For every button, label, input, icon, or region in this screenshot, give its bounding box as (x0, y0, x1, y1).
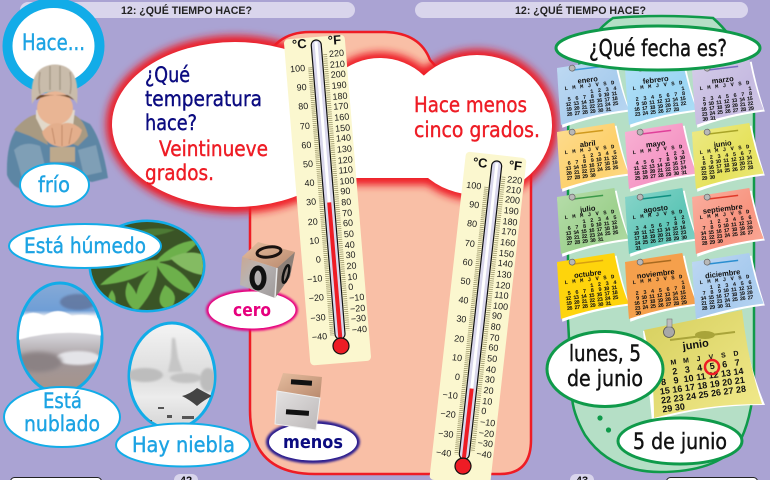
calendar: noviembre: L M M J V S D (632, 273, 683, 286)
thermometer: 29 degrees: 60 (301, 140, 312, 151)
calendar: marzo: 23 24 25 26 27 28 29 (701, 105, 754, 118)
calendar: septiembre: 14 15 16 17 18 19 20 (700, 224, 753, 237)
calendar: agosto (622, 187, 699, 257)
thermometer: 29 degrees: −30 (310, 312, 326, 323)
thermometer: minus 5 degrees: 110 (494, 290, 509, 301)
calendar: marzo: 1 (699, 85, 753, 98)
thermometer: minus 5 degrees: 60 (488, 342, 499, 353)
calendar: enero: 5 6 7 8 9 10 11 (565, 90, 618, 103)
menos bubble (266, 420, 360, 464)
calendar: junio small (689, 122, 766, 192)
large calendar note: junio: 10 (683, 373, 694, 384)
calendar: julio: L M M J V S D (564, 208, 615, 221)
calendar: diciembre: 7 8 9 10 11 12 13 (700, 284, 753, 297)
calendar: agosto: 17 18 19 20 21 22 23 (634, 229, 688, 242)
thermometer: minus 5 degrees: −40 (476, 449, 492, 460)
calendar: junio small: 1 2 3 4 5 6 7 (699, 149, 752, 162)
thermometer: 29 degrees: 110 (338, 164, 353, 176)
Hay niebla bubble: Hay niebla (132, 433, 235, 457)
large calendar note: junio: 14 (733, 366, 744, 377)
calendar: mayo: 25 26 27 28 29 30 31 (634, 169, 688, 182)
calendar: septiembre: L M M J V S D (699, 208, 750, 221)
thermometer: 29 degrees: −40 (351, 324, 367, 335)
large calendar note: junio: 18 (697, 380, 708, 391)
calendar: junio small: 15 16 17 18 19 20 21 (700, 159, 754, 172)
thermometer: 29 degrees: °F (327, 32, 342, 48)
thermometer: minus 5 degrees: °C (472, 154, 489, 171)
calendar: julio: 1 2 3 4 5 (564, 214, 618, 227)
calendar: febrero: 9 10 11 12 13 14 15 (633, 95, 687, 108)
calendar: octubre: 12 13 14 15 16 17 18 (565, 289, 619, 302)
thermometer: 29 degrees: 80 (298, 101, 309, 112)
calendar: noviembre: 30 (635, 309, 641, 317)
calendar: abril: 27 28 29 30 (566, 172, 596, 182)
calendar: marzo: 16 17 18 19 20 21 22 (701, 100, 754, 113)
calendar: julio (554, 187, 631, 257)
thermometer: minus 5 degrees: 210 (506, 184, 522, 196)
large calendar note: junio: 11 (696, 371, 706, 382)
thermometer: minus 5 degrees: 100 (466, 180, 482, 191)
calendar: febrero: L M M J V S D (632, 79, 683, 92)
calendar: mayo: mayo (645, 138, 666, 150)
thermometer: minus 5 degrees: 140 (497, 258, 513, 269)
Está nublado bubble: Está (43, 389, 82, 413)
large calendar note: junio: 26 (710, 387, 722, 398)
icon: die with minus sign (275, 373, 322, 430)
thermometer: 29 degrees: 100 (290, 63, 306, 74)
thermometer: minus 5 degrees: −40 (436, 447, 452, 459)
thermometer: 29 degrees: −40 (311, 331, 328, 342)
calendar: septiembre: 7 8 9 10 11 12 13 (700, 219, 753, 232)
calendar: abril: 20 21 22 23 24 25 26 (566, 164, 619, 177)
calendar: marzo: L M M J V S D (699, 79, 750, 92)
calendar: abril: L M M J V S D (564, 143, 615, 156)
thermometer: minus 5 degrees: 20 (454, 333, 465, 344)
calendar: octubre (554, 252, 631, 322)
thermometer: minus 5 degrees: 190 (503, 205, 519, 217)
calendar: marzo: 30 31 (702, 114, 717, 123)
large calendar note: junio: 19 (709, 378, 720, 390)
thermometer: minus 5 degrees: 220 (507, 174, 523, 186)
calendar: febrero: febrero (642, 74, 669, 86)
calendar: abril: 6 7 8 9 10 11 12 (565, 154, 617, 167)
thermometer: minus 5 degrees: 90 (469, 199, 480, 210)
calendar: diciembre (689, 252, 766, 322)
5 de junio bubble: 5 de junio (633, 430, 727, 455)
large calendar note: junio: 13 (720, 368, 732, 379)
thermometer: 29 degrees: −30 (350, 313, 366, 324)
calendar: junio small: 22 23 24 25 26 27 28 (701, 164, 755, 177)
thermometer: minus 5 degrees: −20 (478, 428, 495, 439)
calendar: noviembre: 2 3 4 5 6 7 8 (633, 284, 686, 297)
thermometer: minus 5 degrees: 170 (501, 226, 517, 238)
thermometer: minus 5 degrees: 0 (454, 372, 460, 382)
lunes, 5 de junio bubble: lunes, 5 (569, 342, 641, 367)
calendar: septiembre: septiembre (702, 202, 743, 216)
large calendar note: junio: J (696, 356, 701, 363)
calendar: octubre: 19 20 21 22 23 24 25 (566, 294, 620, 307)
thermometer: 29 degrees: 0 (348, 282, 354, 292)
thermometer: minus 5 degrees: 160 (500, 237, 516, 248)
decorative dots (597, 415, 611, 433)
thermometer: 29 degrees: 30 (345, 249, 356, 260)
calendar: mayo: 11 12 13 14 15 16 17 (633, 159, 686, 172)
calendar: enero (554, 58, 631, 128)
calendar: febrero (622, 58, 699, 128)
thermometer: minus 5 degrees: 30 (456, 313, 467, 325)
calendar: abril: 13 14 15 16 17 18 19 (565, 159, 618, 172)
calendar: marzo: 9 10 11 12 13 14 15 (700, 95, 754, 108)
calendar: marzo: marzo (711, 74, 735, 86)
calendar: agosto: L M M J V S D (632, 208, 683, 221)
large calendar note: junio: 28 (735, 384, 747, 395)
thermometer: 29 degrees: 170 (333, 101, 349, 112)
calendar: junio small: 8 9 10 11 12 13 14 (700, 154, 753, 167)
large calendar note: junio: M (670, 359, 677, 367)
calendar: abril: abril (579, 138, 596, 149)
large calendar note: junio: 22 (660, 394, 672, 406)
large calendar note: junio: 16 (672, 384, 683, 395)
question text: temperatura (145, 87, 262, 111)
thermometer: 29 degrees: 100 (339, 175, 355, 187)
calendar: junio small: L M M J V S D (699, 143, 750, 156)
large calendar note: junio: 21 (734, 375, 745, 386)
calendar: octubre: 5 6 7 8 9 10 11 (565, 284, 618, 297)
Está húmedo bubble: Está húmedo (24, 234, 146, 258)
frío bubble (20, 164, 89, 206)
Está húmedo bubble (9, 224, 161, 268)
calendar: noviembre (622, 252, 699, 322)
thermometer: minus 5 degrees: −10 (479, 417, 496, 428)
thermometer: minus 5 degrees: −30 (477, 438, 493, 449)
thermometer: 29 degrees: 40 (304, 178, 315, 188)
thermometer: minus 5 degrees: −30 (438, 428, 454, 440)
calendar: septiembre: 21 22 23 24 25 26 27 (701, 229, 754, 242)
large calendar note: junio: 12 (708, 369, 719, 381)
frío bubble: frío (38, 173, 70, 197)
Hace bubble: Hace... (22, 31, 85, 56)
thermometer: minus 5 degrees: 180 (502, 216, 518, 228)
calendar: agosto: 24 25 26 27 28 29 30 (634, 234, 687, 247)
calendar: junio small: 29 30 (701, 174, 715, 182)
thermometer: minus 5 degrees: 130 (496, 269, 512, 280)
large calendar note: junio: 2 (672, 366, 678, 377)
thermometer: 29 degrees: −20 (308, 292, 324, 303)
thermometer: 29 degrees: 10 (347, 271, 358, 282)
calendar: octubre: L M M J V S D (564, 273, 615, 286)
large calendar note: junio: V (708, 354, 714, 361)
header bar left: 12: ¿QUÉ TIEMPO HACE? (121, 4, 252, 17)
photo: clouds (14, 283, 104, 393)
thermometer: 29 degrees: 160 (334, 112, 350, 123)
icon: boy blowing on hands (7, 64, 108, 190)
header bar right (415, 2, 748, 18)
thermometer: minus 5 degrees: 80 (467, 218, 478, 229)
calendar: octubre: 1 2 3 4 (564, 279, 618, 292)
thermometer: minus 5 degrees: 100 (493, 300, 509, 312)
thermometer: minus 5 degrees: 50 (487, 353, 498, 364)
thermometer: 29 degrees: 20 (346, 260, 357, 271)
calendar: agosto: 10 11 12 13 14 15 16 (633, 224, 686, 237)
answer: hace menos cinco grados: cinco grados. (414, 118, 540, 142)
large calendar note: junio: 20 (722, 377, 733, 388)
large calendar note: junio: 30 (674, 401, 685, 413)
calendar: noviembre: 9 10 11 12 13 14 15 (633, 289, 687, 302)
thermometer: 29 degrees: 90 (296, 82, 307, 93)
calendar: febrero: 2 3 4 5 6 7 8 (633, 90, 686, 103)
large calendar note: junio: 7 (734, 357, 740, 368)
large calendar note: junio: 23 (673, 392, 684, 404)
answer: hace menos cinco grados: Hace menos (414, 93, 527, 117)
thermometer: 29 degrees: 120 (337, 154, 353, 166)
thermometer: 29 degrees: 30 (306, 197, 316, 207)
thermometer: 29 degrees: 50 (343, 229, 354, 239)
¿Qué fecha es? bubble: ¿Qué fecha es? (589, 36, 727, 62)
thermometer: 29 degrees: −10 (349, 292, 365, 303)
Está nublado bubble (4, 387, 120, 447)
large calendar note: junio: 3 (684, 364, 690, 375)
calendar: enero: L M M J V S D (564, 79, 615, 92)
question text (145, 63, 262, 135)
thermometer: minus 5 degrees: −10 (442, 389, 458, 401)
thermometer: 29 degrees: 70 (299, 121, 310, 132)
thermometer: 29 degrees: 210 (330, 59, 345, 70)
calendar: febrero: 16 17 18 19 20 21 22 (634, 100, 687, 113)
answer: veintinueve grados (145, 137, 268, 185)
calendar: septiembre: 28 29 30 (701, 238, 723, 247)
thermometer: minus 5 degrees: 10 (451, 352, 463, 363)
thermometer: minus 5 degrees: 40 (458, 295, 469, 306)
calendar: diciembre: 14 15 16 17 18 19 20 (700, 289, 753, 302)
thermometer: 29 degrees (283, 32, 371, 366)
calendar: agosto: 1 2 (632, 214, 685, 227)
calendar: julio: julio (578, 203, 596, 214)
calendar: mayo: 1 2 3 (632, 149, 686, 162)
large calendar note: junio: 29 (662, 403, 673, 414)
calendar: mayo (622, 122, 699, 192)
thermometer: 29 degrees: 180 (332, 91, 348, 102)
calendar: julio: 6 7 8 9 10 11 12 (565, 219, 617, 232)
footer right (570, 474, 758, 480)
calendar: mayo: 18 19 20 21 22 23 24 (634, 164, 688, 177)
calendar: enero: 26 27 28 29 30 31 (566, 106, 612, 118)
calendar: julio: 20 21 22 23 24 25 26 (566, 229, 619, 242)
calendar: noviembre: 16 17 18 19 20 21 22 (634, 294, 687, 307)
large calendar note: junio: 17 (684, 382, 695, 393)
thermometer: 29 degrees: −10 (307, 273, 323, 285)
Hay niebla bubble (116, 424, 250, 466)
calendar: julio: 27 28 29 30 31 (566, 236, 605, 247)
calendar: agosto: 3 4 5 6 7 8 9 (633, 219, 685, 232)
thermometer: minus 5 degrees: °F (508, 157, 523, 174)
thermometer: 29 degrees: 200 (330, 69, 346, 80)
Está nublado bubble: nublado (24, 412, 100, 436)
large calendar note: junio: 25 (698, 389, 709, 400)
thermometer: 29 degrees: 60 (343, 218, 353, 228)
icon: die with zero (240, 242, 295, 298)
calendar: septiembre: 1 2 3 4 5 6 (699, 214, 752, 227)
thermometer: 29 degrees: 150 (335, 123, 351, 134)
answer: veintinueve grados: Veintinueve (159, 137, 268, 161)
calendar: noviembre: 1 (632, 279, 686, 292)
large calendar note: junio: S (721, 352, 727, 360)
large calendar note: junio: M (683, 357, 690, 365)
thermometer: 29 degrees: °C (292, 36, 308, 52)
thermometer: 29 degrees: 50 (303, 159, 313, 169)
calendar: julio: 13 14 15 16 17 18 19 (565, 224, 618, 237)
large calendar note: junio (643, 310, 765, 421)
calendar: diciembre: diciembre (705, 267, 741, 280)
large calendar note: junio: 5 (709, 361, 715, 371)
thermometer: minus 5 degrees: 10 (482, 396, 493, 407)
footer left (10, 474, 198, 480)
thermometer: minus 5 degrees: 120 (495, 280, 511, 291)
calendar: enero: 19 20 21 22 23 24 25 (566, 100, 620, 113)
thermometer: minus 5 degrees: 80 (490, 321, 501, 332)
thermometer: 29 degrees: 40 (344, 240, 355, 250)
calendar: octubre: octubre (573, 268, 602, 280)
thermometer: minus 5 degrees: 70 (489, 332, 500, 343)
calendar: diciembre: 21 22 23 24 25 26 27 (701, 294, 754, 307)
calendar: diciembre: L M M J V S D (699, 273, 750, 286)
question text: hace? (145, 111, 197, 135)
calendar: noviembre: noviembre (636, 267, 675, 281)
thermometer: minus 5 degrees: 50 (460, 276, 471, 287)
large calendar note: junio: 27 (723, 385, 734, 397)
thermometer: minus 5 degrees: 60 (462, 257, 473, 268)
thermometer: minus 5 degrees: 150 (498, 248, 514, 259)
lunes, 5 de junio bubble (547, 332, 663, 406)
thermometer: 29 degrees: 220 (329, 48, 344, 59)
panel: peach temperature background (250, 32, 531, 474)
cero bubble: cero (233, 300, 271, 321)
large calendar note: junio: 6 (722, 359, 728, 370)
thermometer: minus 5 degrees: 40 (485, 364, 496, 375)
thermometer: minus 5 degrees: 90 (491, 310, 502, 321)
thermometer: minus 5 degrees: 200 (504, 194, 521, 206)
large calendar note: junio: 9 (673, 375, 679, 386)
thermometer: 29 degrees: 80 (341, 197, 352, 207)
¿Qué fecha es? bubble (556, 26, 760, 70)
thermometer: 29 degrees: 90 (340, 186, 351, 196)
calendar: diciembre: 28 29 30 31 (701, 302, 732, 312)
calendar: abril: 1 2 3 4 5 (564, 149, 618, 162)
thermometer: 29 degrees: 140 (336, 132, 351, 144)
calendar: febrero: 1 (632, 85, 686, 98)
calendar: marzo (689, 58, 766, 128)
photo: wet leaves (90, 221, 206, 312)
cero bubble (206, 289, 298, 331)
large calendar note: junio: 8 (660, 377, 667, 387)
calendar: noviembre: 23 24 25 26 27 28 29 (634, 299, 687, 312)
header bar right: 12: ¿QUÉ TIEMPO HACE? (515, 4, 646, 17)
large calendar note: junio: D (733, 350, 739, 358)
calendar: octubre: 26 27 28 29 30 31 (566, 300, 612, 312)
thermometer: 29 degrees: 190 (331, 80, 347, 91)
question text: ¿Qué (145, 63, 190, 87)
calendar: marzo: 2 3 4 5 6 7 8 (700, 90, 753, 103)
calendar: febrero: 23 24 25 26 27 28 (634, 106, 680, 118)
large calendar note: junio: 15 (659, 385, 670, 397)
thermometer: 29 degrees: 130 (336, 143, 352, 155)
thermometer: 29 degrees: 20 (307, 216, 318, 227)
calendar: diciembre: 1 2 3 4 5 6 (699, 279, 752, 292)
panel: green calendar background (568, 16, 754, 472)
calendar: agosto: 31 (635, 244, 642, 252)
lunes, 5 de junio bubble: de junio (567, 367, 643, 392)
answer: hace menos cinco grados (414, 93, 540, 142)
calendar: abril (554, 122, 631, 192)
thermometer: minus 5 degrees: 70 (464, 238, 475, 249)
thermometer: minus 5 degrees: 20 (483, 385, 494, 396)
photo: fog (127, 323, 216, 429)
calendar: mayo: 4 5 6 7 8 9 10 (633, 154, 685, 167)
thermometer: minus 5 degrees: −20 (440, 408, 456, 420)
large calendar note: junio: 4 (697, 363, 703, 373)
large calendar note: junio: 24 (685, 391, 697, 402)
calendar: junio small: junio (712, 138, 733, 150)
thermometer: 29 degrees: −20 (350, 303, 366, 314)
thermometer: 29 degrees: 70 (342, 208, 353, 218)
thermometer: minus 5 degrees: 30 (484, 374, 495, 385)
answer: veintinueve grados: grados. (145, 161, 214, 185)
thermometer: minus 5 degrees (429, 151, 527, 480)
Hace bubble (8, 3, 100, 89)
calendar: enero: enero (577, 74, 599, 86)
calendar: septiembre (689, 187, 766, 257)
menos bubble: menos (283, 432, 343, 453)
calendar: enero: 12 13 14 15 16 17 18 (565, 95, 619, 108)
thermometer: minus 5 degrees: 0 (481, 406, 487, 416)
thermometer: 29 degrees: 10 (309, 235, 320, 246)
calendar: agosto: agosto (643, 203, 669, 215)
calendar: enero: 1 2 3 4 (564, 85, 618, 98)
5 de junio bubble (618, 418, 742, 464)
calendar: mayo: L M M J V S D (632, 143, 683, 156)
thermometer: 29 degrees: 0 (315, 254, 321, 265)
header bar left (20, 2, 355, 18)
large calendar note: junio: junio (681, 337, 710, 353)
speech cloud (106, 36, 558, 214)
